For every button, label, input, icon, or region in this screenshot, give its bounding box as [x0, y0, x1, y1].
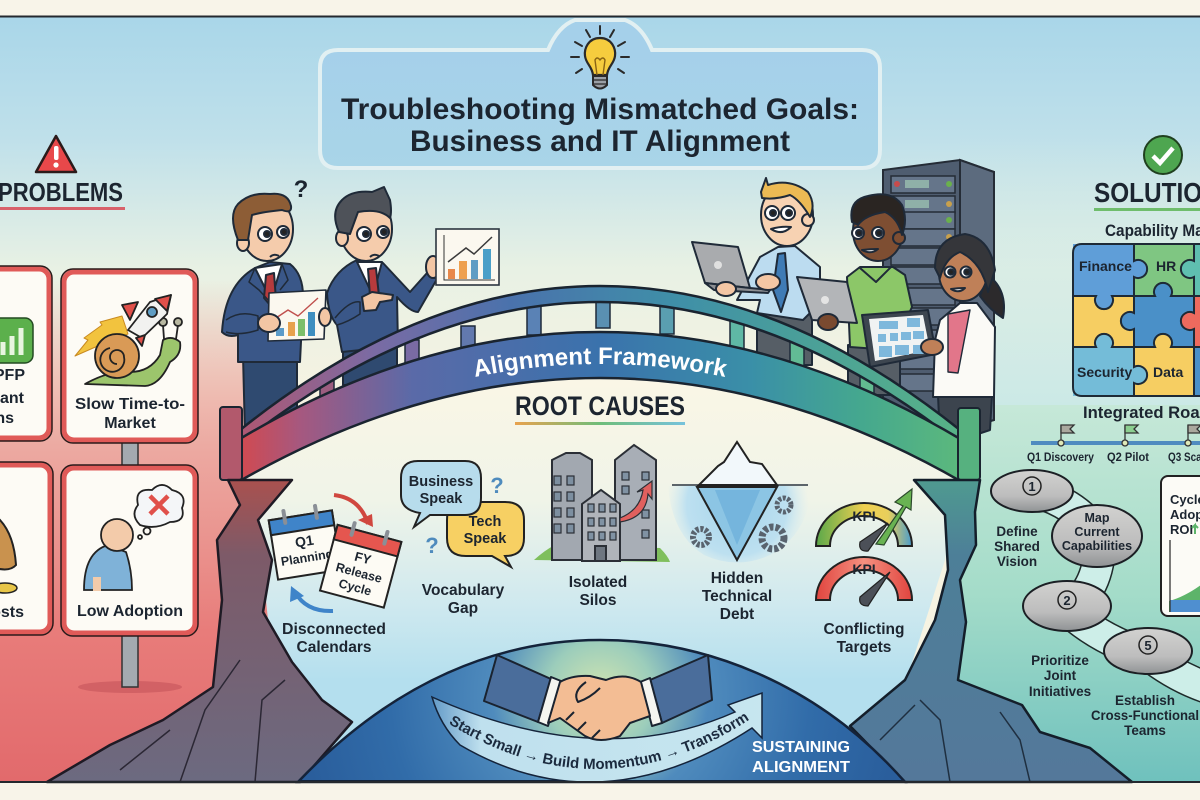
bridge	[219, 284, 981, 481]
KPI dashboard card	[1161, 476, 1200, 616]
icon: warning triangle	[36, 136, 76, 172]
cause: hidden technical debt: Hidden	[711, 570, 763, 587]
bridge posts	[320, 298, 874, 410]
stepping stones path: Teams	[1124, 723, 1166, 738]
cause: isolated silos: Silos	[579, 592, 617, 609]
stepping stones path: Vision	[997, 554, 1037, 569]
business speech bubble	[401, 461, 481, 527]
tech speech bubble	[447, 502, 524, 567]
left bridge pillar	[220, 407, 242, 480]
card: slow time-to-market: Market	[104, 415, 156, 432]
title panel: Business and IT Alignment	[410, 125, 790, 158]
calendar arrows	[334, 495, 368, 524]
card: slow time-to-market	[61, 269, 198, 443]
IT colleague in green shirt	[797, 194, 912, 395]
cause: vocabulary gap	[401, 461, 524, 617]
cause: isolated silos: Isolated	[569, 574, 627, 591]
heading: problems: PROBLEMS	[0, 177, 123, 207]
stone 5	[1104, 628, 1192, 674]
cause: hidden technical debt	[668, 442, 812, 623]
card: partial top left	[0, 266, 52, 441]
cause: disconnected calendars: Calendars	[297, 639, 371, 656]
heading: root causes: ROOT CAUSES	[515, 391, 685, 421]
cause: isolated silos	[534, 445, 670, 609]
roadmap flags	[1058, 425, 1200, 446]
stone: map current capabilities	[1052, 505, 1142, 567]
cause: conflicting targets: Conflicting	[824, 621, 904, 638]
icon: gears	[693, 498, 791, 549]
stone 2	[1023, 581, 1111, 631]
icon: question mark: ?	[294, 176, 308, 203]
right bridge pillar	[958, 408, 980, 480]
Q1 calendar: Q1	[294, 532, 315, 550]
building left	[552, 453, 592, 560]
card: low adoption: Low Adoption	[77, 603, 183, 620]
icon: light bulb	[571, 26, 629, 88]
chart held by first businessman	[268, 290, 326, 341]
cause: disconnected calendars	[268, 495, 403, 656]
stepping stones path	[991, 470, 1200, 738]
right cliff	[850, 480, 1132, 782]
building small	[582, 490, 620, 561]
Q1 calendar	[268, 503, 341, 580]
integrated roadmap: Q1 Discovery	[1027, 450, 1094, 464]
card: low adoption	[61, 465, 198, 636]
businessman with chart	[222, 194, 331, 435]
capability map	[1073, 221, 1200, 396]
FY calendar	[320, 519, 403, 608]
stone 5: 5	[1144, 638, 1152, 653]
building tall	[615, 445, 656, 560]
laptop	[692, 242, 770, 293]
left cliff	[47, 480, 352, 782]
icon: disengaged person	[84, 485, 184, 591]
title panel	[320, 20, 880, 168]
puzzle: HR	[1156, 258, 1176, 274]
sustaining alignment dome: ALIGNMENT	[752, 759, 850, 776]
cause: disconnected calendars: Disconnected	[282, 621, 386, 638]
tech speech bubble: Tech	[469, 514, 501, 530]
gauge: top KPI	[816, 489, 912, 551]
stepping stones path: Prioritize	[1031, 653, 1089, 668]
server rack	[883, 160, 994, 430]
stone: map current capabilities: Current	[1074, 525, 1120, 539]
icon: handshake	[484, 655, 712, 740]
FY calendar: Cycle	[337, 576, 373, 599]
sustaining alignment dome	[295, 638, 908, 784]
Q1 calendar: Planning	[280, 547, 334, 569]
silo arrow	[620, 481, 652, 522]
cause: hidden technical debt: Debt	[720, 606, 754, 623]
FY calendar: Release	[334, 560, 384, 586]
gauge: bottom KPI	[816, 557, 912, 606]
stepping stones path: Establish	[1115, 693, 1175, 708]
puzzle: Security	[1077, 364, 1132, 380]
cause: vocabulary gap: ?	[490, 473, 504, 498]
card: slow time-to-market: Slow Time-to-	[75, 396, 185, 413]
sustaining alignment dome: SUSTAINING	[752, 739, 850, 756]
heading: problems	[0, 136, 125, 210]
gauge: top KPI: KPI	[852, 508, 876, 524]
curved progress arrow: Start Small → Build Momentum → Transform	[450, 714, 749, 770]
stepping stones path: Joint	[1044, 668, 1077, 683]
stepping stones path: Initiatives	[1029, 684, 1091, 699]
chart held up by second businessman	[436, 229, 499, 285]
KPI dashboard card: ROI	[1170, 522, 1193, 537]
tech speech bubble: Speak	[464, 531, 507, 547]
stepping stones path: Shared	[994, 539, 1040, 554]
businessman pointing	[327, 187, 440, 385]
card: partial top left: ant	[0, 390, 25, 407]
puzzle: Data	[1153, 364, 1184, 380]
sign posts	[78, 440, 182, 693]
cause: conflicting targets: Targets	[837, 639, 891, 656]
cause: vocabulary gap: Vocabulary	[422, 582, 505, 599]
stone 1	[991, 470, 1073, 512]
gauge: bottom KPI: KPI	[852, 561, 876, 577]
puzzle	[1073, 244, 1200, 396]
bridge label: Alignment Framework	[476, 348, 728, 377]
stone 1: 1	[1028, 479, 1036, 494]
central cavern	[240, 378, 960, 782]
stone 2: 2	[1063, 593, 1071, 608]
stepping stones path: Cross-Functional	[1091, 708, 1199, 723]
curved progress arrow	[430, 692, 763, 781]
IT colleague with tablet	[862, 234, 1004, 440]
stone: map current capabilities: Map	[1084, 511, 1110, 525]
integrated roadmap: Q2 Pilot	[1107, 450, 1149, 464]
cause: vocabulary gap: ?	[425, 533, 439, 558]
bridge railing	[240, 286, 960, 444]
icon: check circle	[1144, 136, 1182, 174]
heading: solutions	[1094, 136, 1200, 211]
business speech bubble: Business	[409, 474, 473, 490]
icon: snail with rocket	[75, 295, 182, 386]
IT colleague with laptop	[692, 178, 820, 365]
tablet	[862, 310, 936, 367]
FY calendar: FY	[353, 549, 373, 567]
cause: conflicting targets	[816, 489, 912, 656]
cause: vocabulary gap: Gap	[448, 600, 478, 617]
bridge deck	[238, 332, 962, 482]
cause: hidden technical debt: Technical	[702, 588, 772, 605]
business speech bubble: Speak	[420, 491, 463, 507]
integrated roadmap	[1027, 403, 1200, 464]
stepping stones path: Define	[996, 524, 1038, 539]
stone: map current capabilities: Capabilities	[1062, 539, 1132, 553]
second laptop	[797, 277, 857, 323]
puzzle: Finance	[1079, 258, 1132, 274]
card: partial bottom left	[0, 462, 53, 635]
title text: Troubleshooting Mismatched Goals:	[341, 93, 859, 126]
